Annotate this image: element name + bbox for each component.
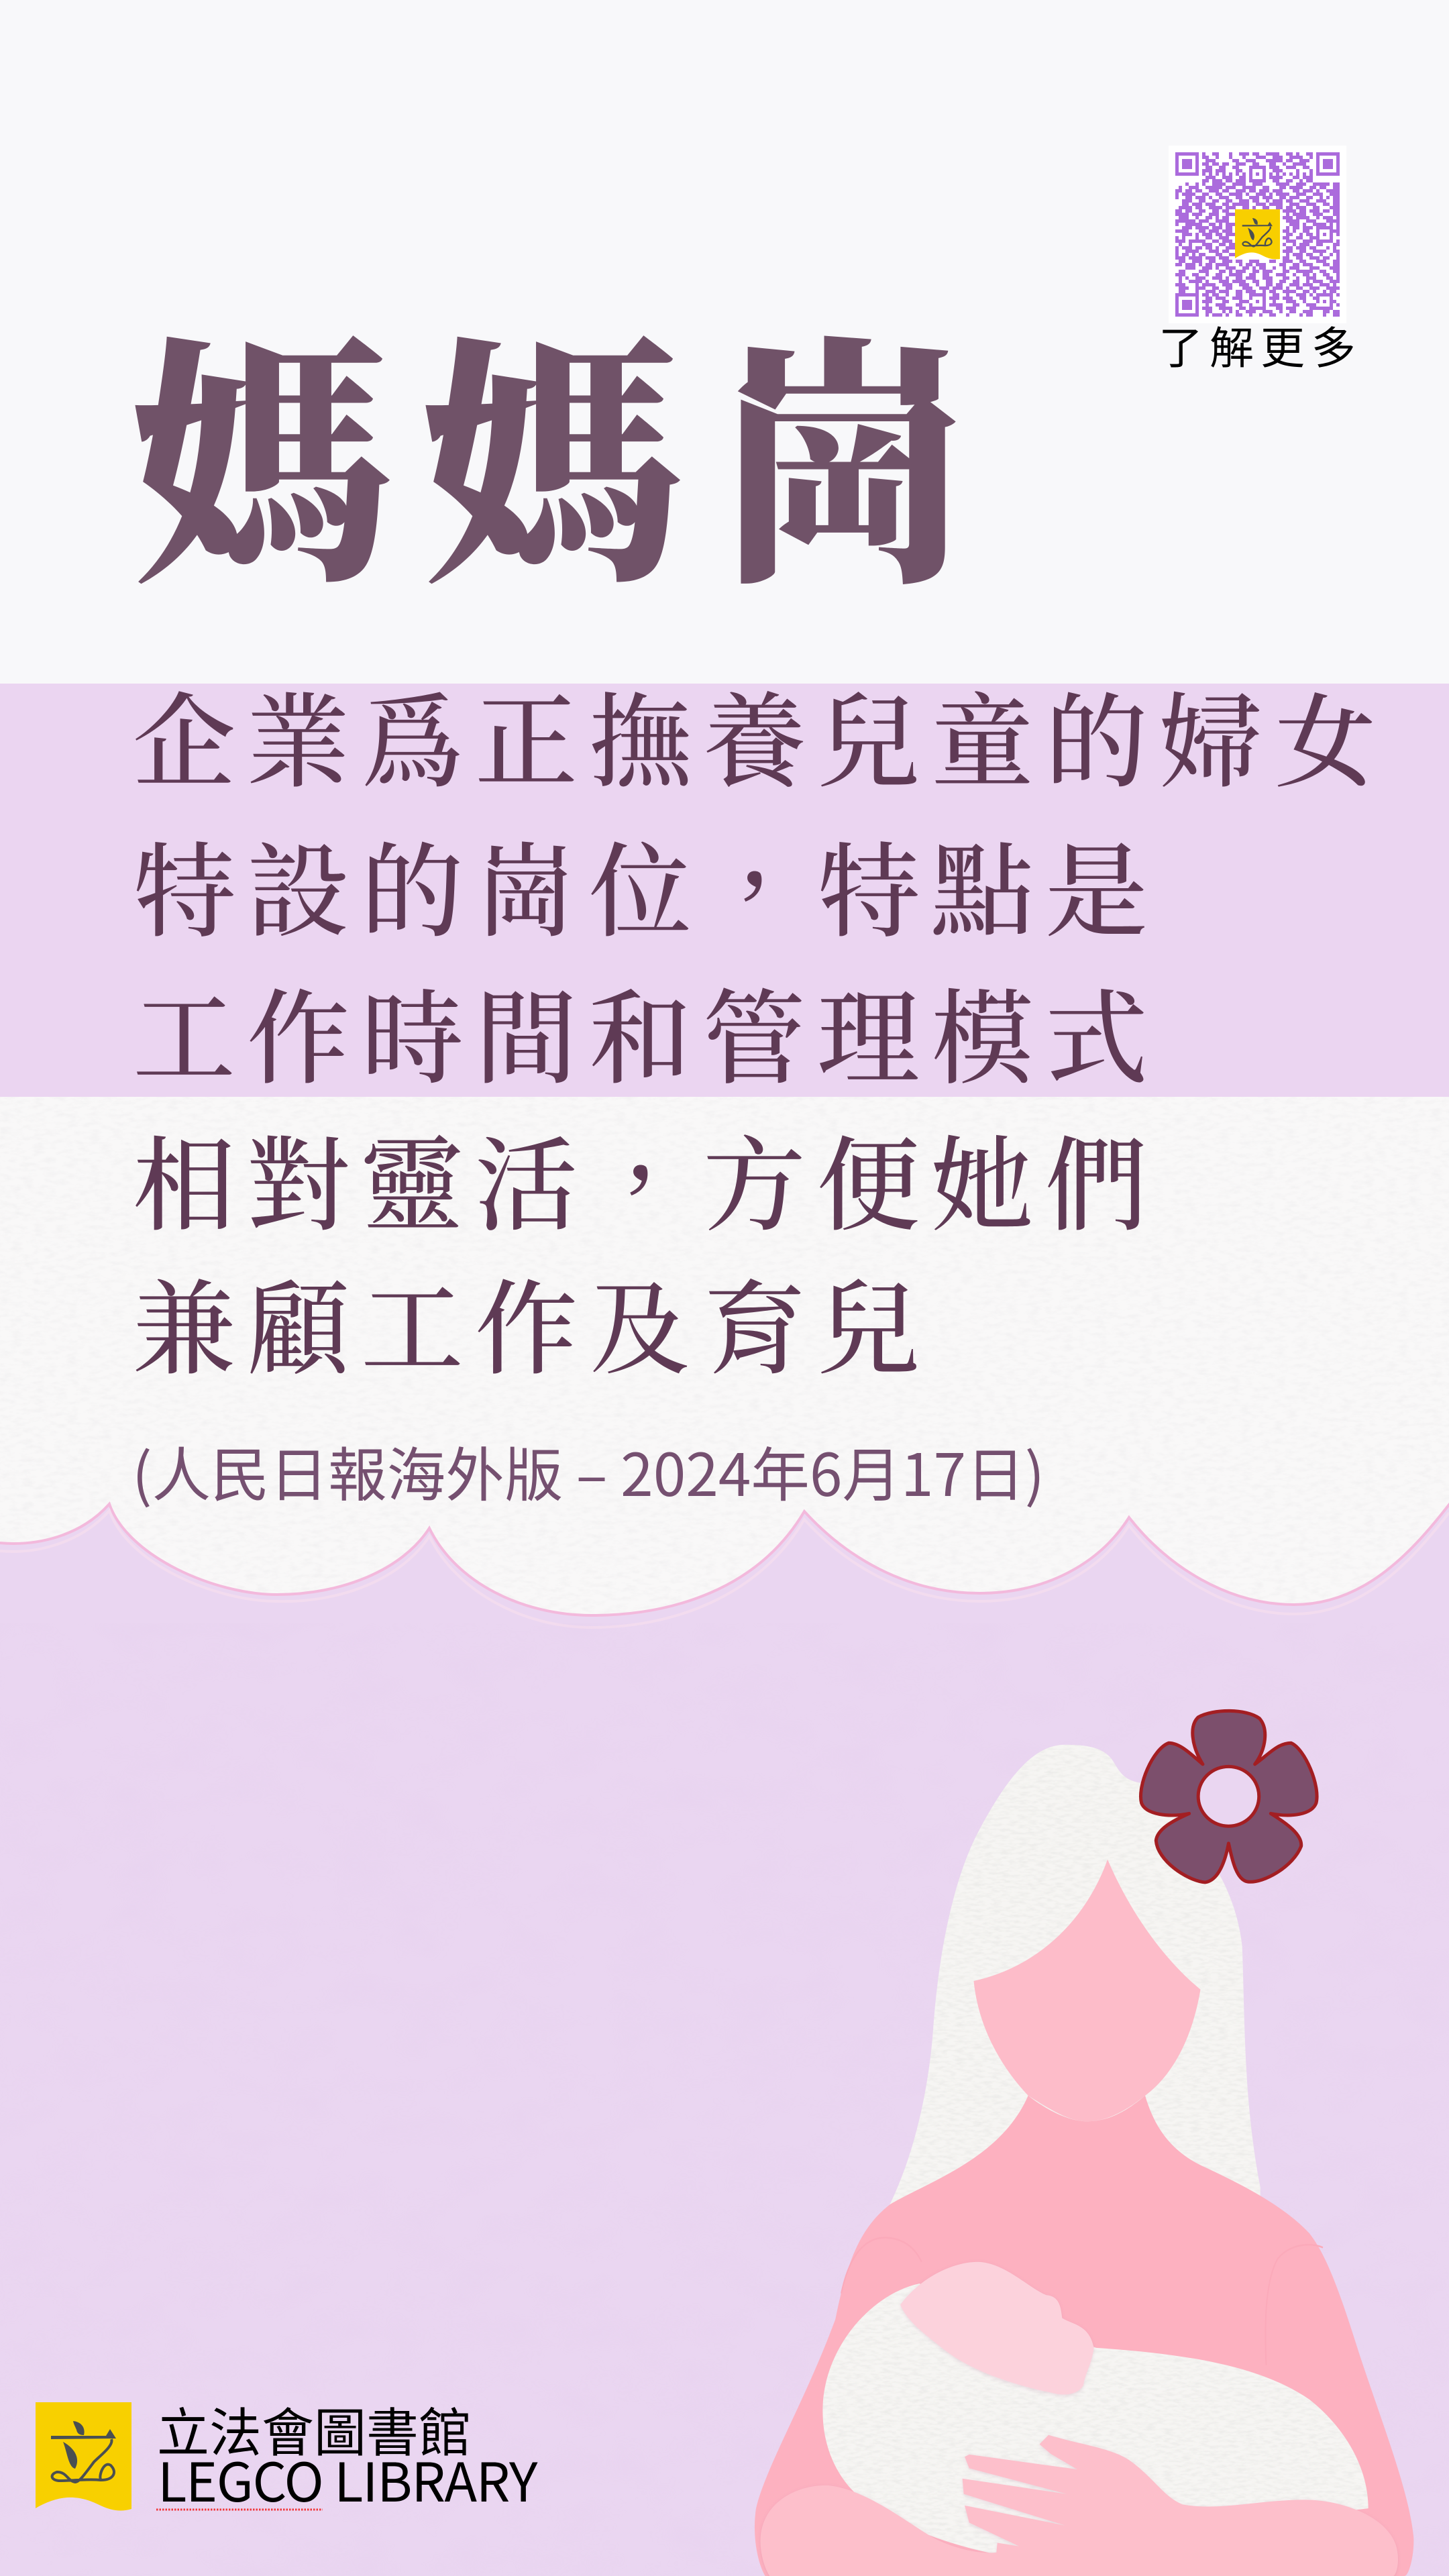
definition text line 5: 兼顧工作及育兒	[133, 1247, 931, 1395]
QR code	[1169, 146, 1346, 323]
face	[974, 1860, 1201, 2121]
definition text line 2: 特設的崗位，特點是	[133, 810, 1159, 957]
library name Chinese: 立法會圖書館	[157, 2392, 471, 2467]
title: 媽媽崗	[131, 258, 1003, 635]
sleeve seams	[841, 2238, 1323, 2365]
blanket	[822, 2284, 1368, 2555]
hair	[890, 1745, 1260, 2251]
red dotted underline	[156, 2509, 323, 2510]
library name English: LEGCO LIBRARY	[158, 2440, 537, 2518]
definition text line 4: 相對靈活，方便她們	[133, 1104, 1159, 1251]
illustration: mother holding baby	[755, 1711, 1413, 2576]
blanket lower sliver	[1124, 2568, 1219, 2576]
flower	[1140, 1711, 1317, 1882]
definition text line 3: 工作時間和管理模式	[133, 957, 1159, 1104]
body	[755, 2096, 1413, 2576]
baby head	[900, 2262, 1094, 2395]
library logo badge	[36, 2402, 131, 2510]
QR modules	[1175, 154, 1340, 315]
white paper background	[0, 1097, 1449, 1633]
QR caption: 了解更多	[1159, 313, 1362, 377]
hair fringe	[955, 1826, 1108, 1980]
QR centre logo	[1235, 209, 1280, 260]
purple text band	[0, 684, 1449, 1097]
definition text line 1: 企業爲正撫養兒童的婦女	[133, 660, 1387, 808]
source citation: (人民日報海外版 – 2024年6月17日)	[132, 1428, 1044, 1513]
arm and hand	[761, 2435, 1398, 2576]
lilac paper with scalloped edge	[0, 1493, 1449, 2576]
